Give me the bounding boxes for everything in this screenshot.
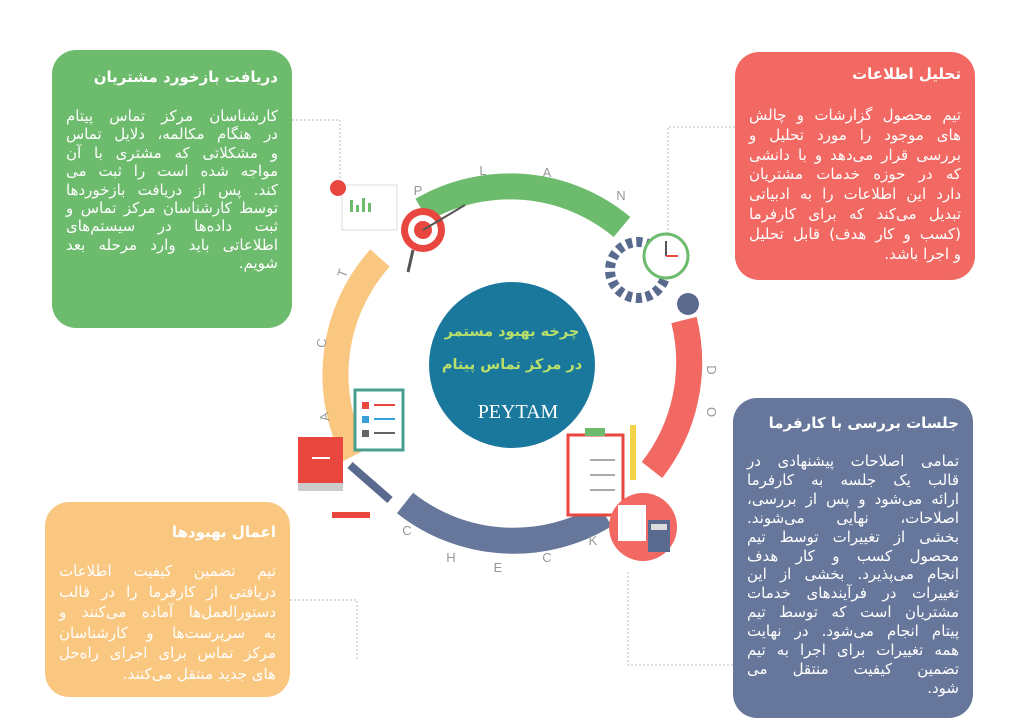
heading: orange: اعمال بهبودها <box>172 523 276 541</box>
text: blue body: تمامی اصلاحات پیشنهادی در <box>747 452 959 470</box>
text: red body: های موجود را مورد تحلیل و <box>749 126 961 144</box>
text: blue body: بخشی از تغییرات توسط تیم <box>747 528 959 546</box>
letters: K <box>589 533 598 548</box>
center circle <box>429 282 595 448</box>
text: red body: دارد این اطلاعات را به ادبیاتی <box>749 185 961 203</box>
text: green body: کند. پس از دریافت بازخوردها <box>66 181 278 199</box>
letters: C <box>314 338 329 348</box>
text: red body: و اجرا باشد. <box>884 245 961 263</box>
heading: red: تحلیل اطلاعات <box>852 65 961 83</box>
text: orange body: دریافتی از کارفرما را در قالب <box>59 582 276 600</box>
text: red body <box>748 106 961 263</box>
text: green body <box>65 107 278 272</box>
text: blue body <box>746 452 959 697</box>
arc: check (blue) <box>405 503 605 541</box>
letters: C <box>542 550 552 565</box>
icon: clipboard <box>568 425 636 515</box>
text: orange body: دستورالعمل‌ها آماده می‌کنند و <box>59 603 276 621</box>
letters: T <box>334 267 351 279</box>
icon: book and gavel <box>298 437 390 518</box>
text: blue body: مشتریان است که توسط تیم <box>747 603 959 621</box>
letters <box>314 163 719 575</box>
icon: target <box>401 205 465 272</box>
text: blue body: قالب یک جلسه به کارفرما <box>747 471 959 489</box>
letters: D <box>704 365 719 375</box>
text: green body: کارشناسان مرکز تماس پیتام <box>66 107 278 125</box>
panel: customer feedback (green) <box>52 50 292 328</box>
text: green body: مواجه شده است را ثبت می <box>66 162 278 180</box>
text: blue body: همه تغییرات برای اجرا به تیم <box>747 641 959 659</box>
text: blue body: محصول کسب و کار هدف <box>747 547 959 565</box>
text: orange body <box>58 562 276 682</box>
text: blue body: تغییرات در فرآیندهای خدمات <box>747 584 959 602</box>
arc: do (red) <box>652 320 689 470</box>
text: orange body: تیم تضمین کیفیت اطلاعات <box>59 562 276 580</box>
center circle: در مرکز تماس پیتام <box>442 357 582 373</box>
arc: act (orange) <box>335 258 380 455</box>
letters: L <box>479 163 487 178</box>
arc: plan (green) <box>422 186 622 227</box>
center circle: PEYTAM <box>478 401 559 423</box>
text: blue body: انجام می‌پذیرد. بخشی از این <box>747 565 959 583</box>
text: red body: (کسب و کار هدف) قابل تحلیل <box>749 225 961 243</box>
letters: A <box>316 411 333 422</box>
text: orange body: مرکز تماس برای اجرای راه‌حل <box>59 644 276 662</box>
icon: gear and clock <box>610 234 699 315</box>
icon: report chart <box>330 180 397 230</box>
text: red body: بررسی قرار می‌دهد و با دانشی <box>749 146 961 164</box>
text: green body: ثبت داده‌ها در سیستم‌های <box>66 217 278 235</box>
text: green body: و مشکلاتی که مشتری با آن <box>66 144 278 162</box>
letters: A <box>543 165 552 180</box>
icon: calculator <box>609 493 677 561</box>
letters: N <box>616 188 626 203</box>
panel: apply improvements (orange) <box>45 502 290 697</box>
letters: C <box>402 523 412 538</box>
text: green body: اطلاعاتی باید وارد مرحله بعد <box>66 236 278 254</box>
letters: O <box>704 407 719 417</box>
text: orange body: های جدید منتقل می‌کنند. <box>123 664 276 682</box>
text: blue body: تضمین کیفیت منتقل می <box>747 660 959 678</box>
text: blue body: شود. <box>927 679 959 697</box>
heading: green: دریافت بازخورد مشتریان <box>94 68 278 86</box>
letters: H <box>446 550 456 565</box>
text: blue body: پیتام انجام می‌شود. در نهایت <box>747 622 959 640</box>
center circle: چرخه بهبود مستمر <box>444 324 579 340</box>
letters: P <box>414 183 422 198</box>
text: green body: شویم. <box>239 254 278 272</box>
heading: blue: جلسات بررسی با کارفرما <box>769 414 959 432</box>
text: green body: توسط کارشناسان مرکز تماس و <box>66 199 278 217</box>
text: blue body: اصلاحات، نهایی می‌شوند. <box>747 509 959 527</box>
text: red body: که در حوزه خدمات مشتریان <box>749 165 961 183</box>
letters: E <box>494 560 503 575</box>
text: red body: تبدیل می‌کند که برای کارفرما <box>749 205 961 223</box>
panel: review meetings (blue) <box>733 398 973 718</box>
text: blue body: ارائه می‌شود و پس از بررسی، <box>747 490 959 508</box>
text: orange body: به سرپرست‌ها و کارشناسان <box>59 624 276 642</box>
text: red body: تیم محصول گزارشات و چالش <box>749 106 961 124</box>
icon: checklist <box>355 390 403 450</box>
text: green body: در هنگام مکالمه، دلایل تماس <box>66 125 278 143</box>
panel: data analysis (red) <box>735 52 975 280</box>
